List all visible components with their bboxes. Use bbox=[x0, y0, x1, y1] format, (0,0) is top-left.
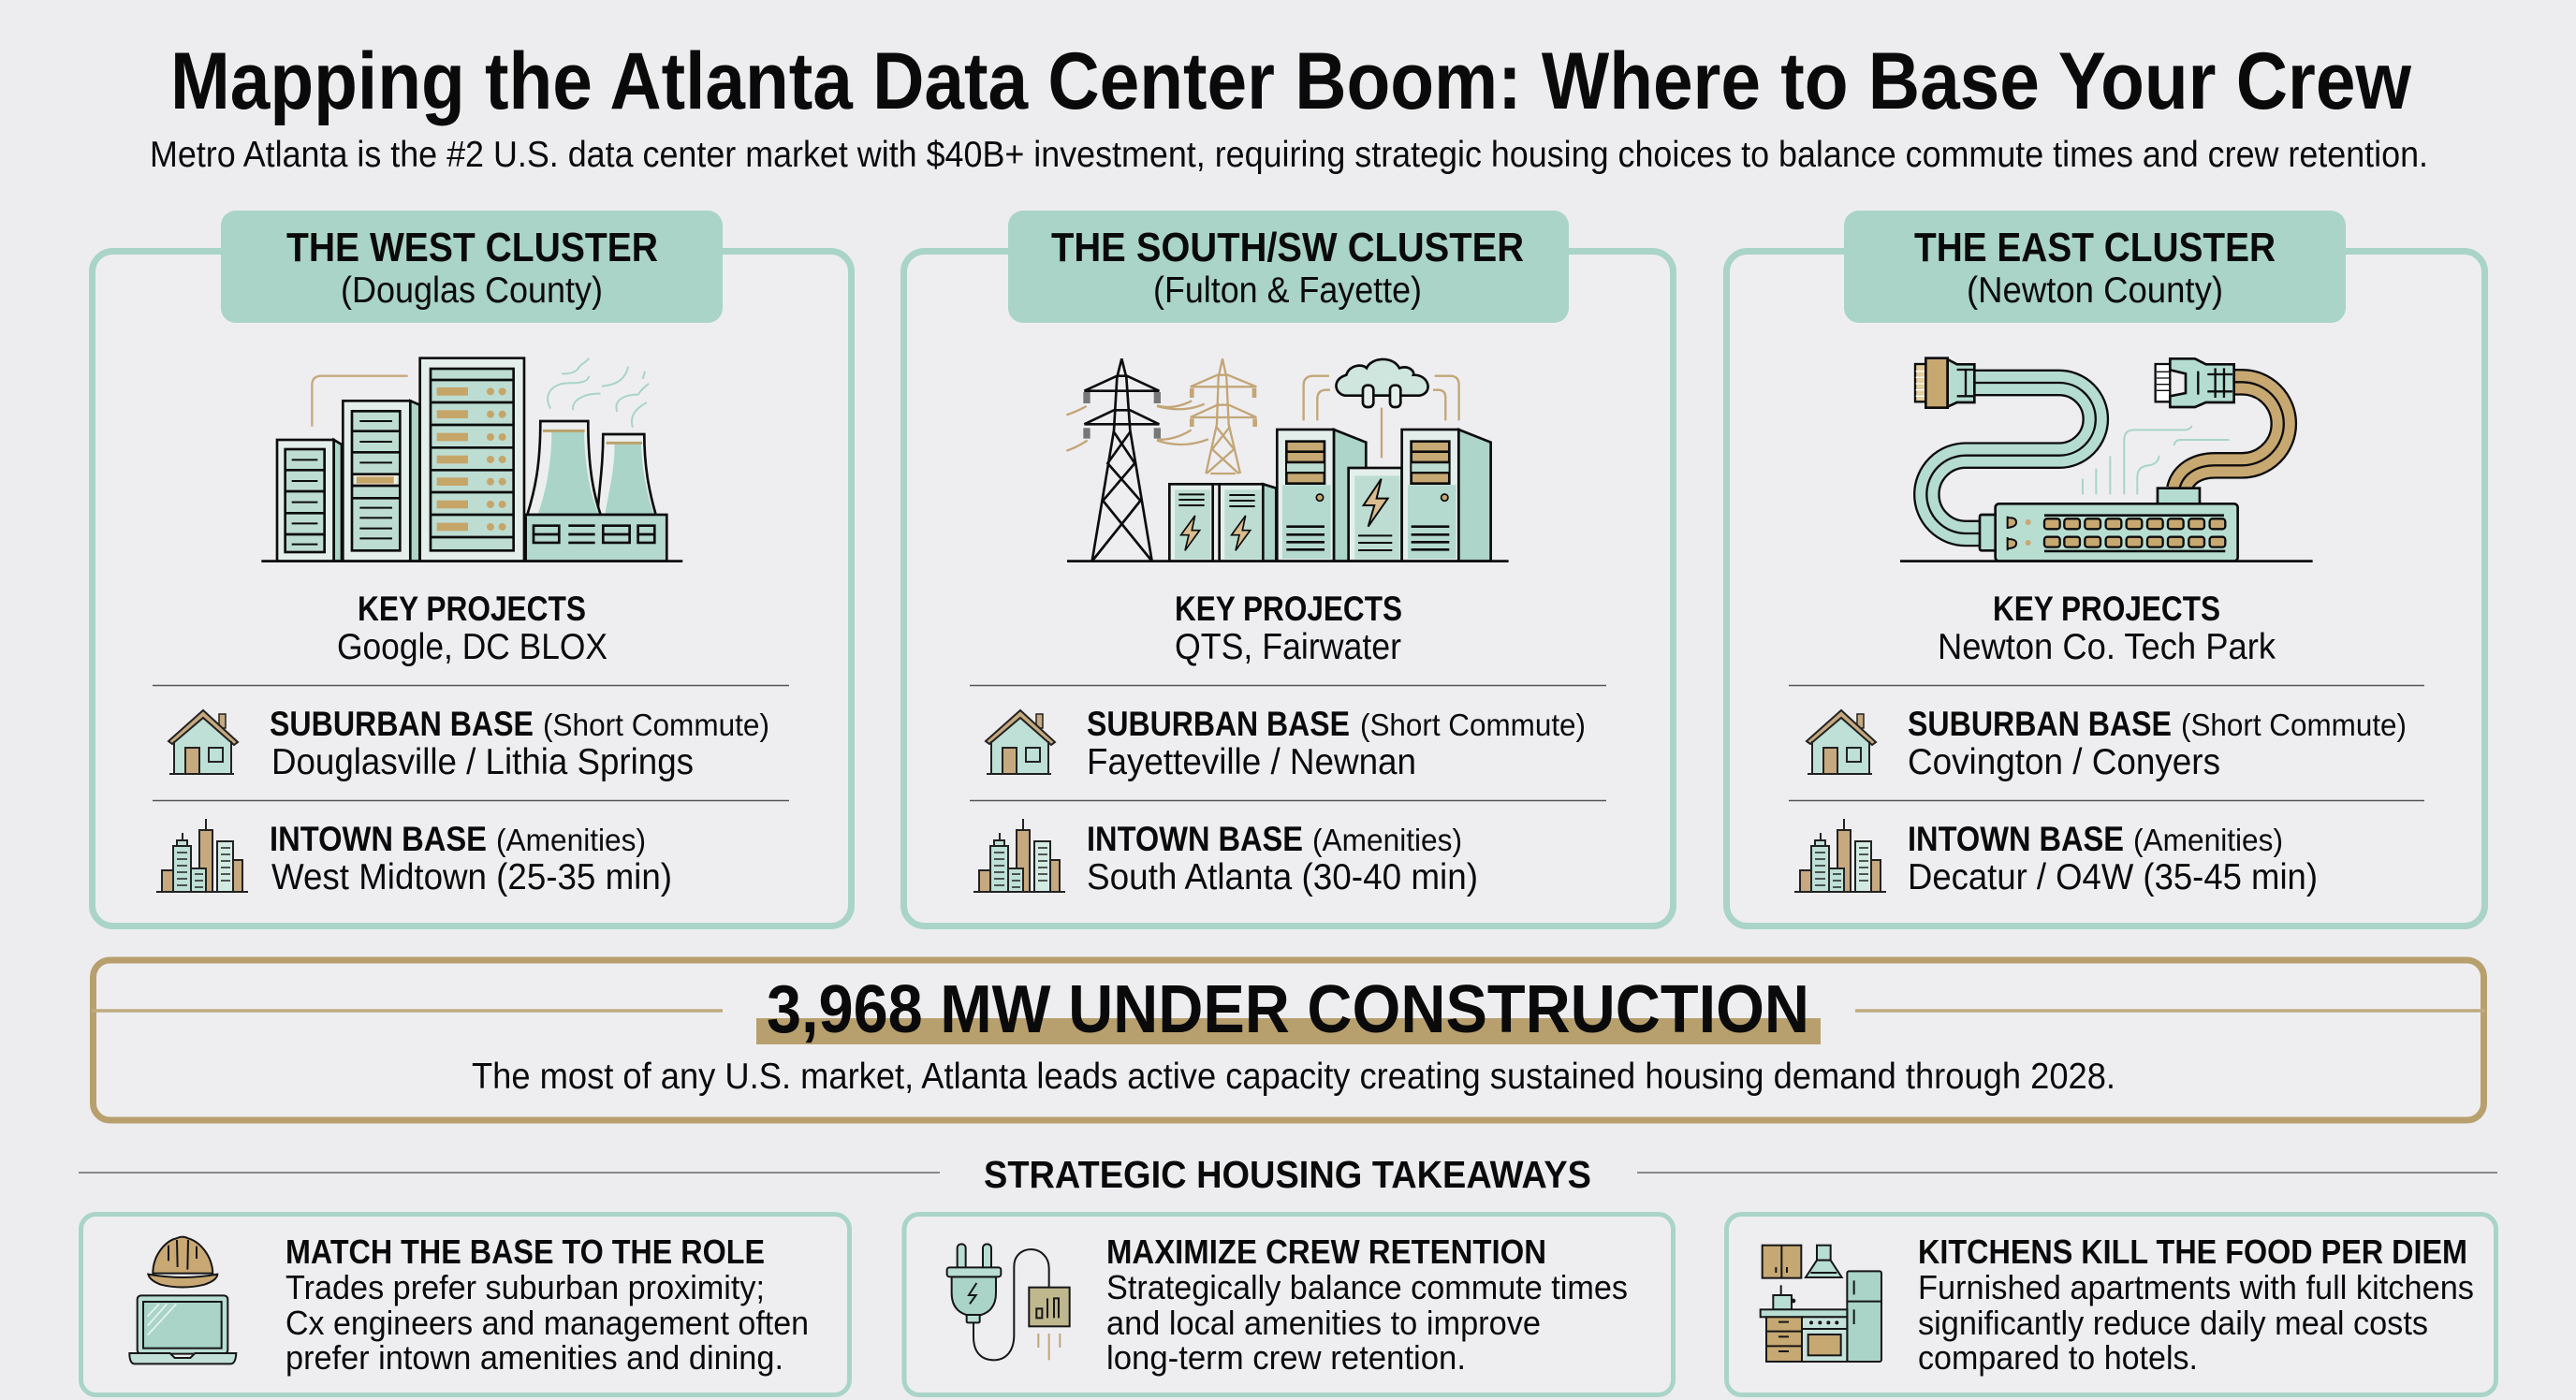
illustration: network cables and switch bbox=[1900, 358, 2313, 561]
section heading: strategic housing takeaways: STRATEGIC HOUSING TAKEAWAYS bbox=[984, 1153, 1591, 1196]
suburban base: west: SUBURBAN BASE bbox=[270, 705, 534, 743]
card text: match the base to the role: Cx engineers and management often bbox=[285, 1304, 809, 1342]
key projects: east: KEY PROJECTS bbox=[1993, 590, 2220, 628]
key projects: west: Google, DC BLOX bbox=[337, 627, 607, 667]
heading tab: south/sw cluster: (Fulton & Fayette) bbox=[1153, 270, 1422, 311]
callout: 3,968 MW under construction: The most of any U.S. market, Atlanta leads active capacity creating sustained housing demand through 2028. bbox=[472, 1057, 2115, 1097]
card text: maximize crew retention: Strategically balance commute times bbox=[1106, 1268, 1628, 1306]
intown base: west: INTOWN BASE bbox=[270, 820, 487, 858]
icon: suburban house bbox=[1807, 710, 1876, 774]
card text: match the base to the role: MATCH THE BASE TO THE ROLE bbox=[285, 1232, 765, 1271]
suburban base: south: (Short Commute) bbox=[1360, 707, 1586, 742]
key projects: south bbox=[1175, 590, 1402, 667]
suburban base: west: Douglasville / Lithia Springs bbox=[271, 742, 694, 782]
icon: intown skyline bbox=[973, 819, 1065, 892]
panel: west cluster bbox=[92, 211, 852, 926]
suburban base: east: SUBURBAN BASE bbox=[1908, 705, 2172, 743]
illustration: transmission towers and powered data halls bbox=[1066, 358, 1509, 561]
illustration: data center racks and cooling towers bbox=[261, 358, 682, 561]
card text: match the base to the role bbox=[285, 1232, 809, 1377]
heading tab: south/sw cluster bbox=[1008, 211, 1569, 323]
intown base: south: (Amenities) bbox=[1312, 823, 1462, 857]
icon: kitchen bbox=[1761, 1246, 1881, 1362]
card text: match the base to the role: prefer intown amenities and dining. bbox=[285, 1338, 783, 1377]
key projects: south: QTS, Fairwater bbox=[1175, 627, 1401, 667]
icon: plug and meter bbox=[947, 1244, 1070, 1360]
key projects: east: Newton Co. Tech Park bbox=[1938, 627, 2276, 667]
card: match the base to the role bbox=[80, 1215, 850, 1394]
heading tab: west cluster: THE WEST CLUSTER bbox=[286, 225, 658, 270]
heading tab: east cluster bbox=[1844, 211, 2346, 323]
card text: match the base to the role: Trades prefer suburban proximity; bbox=[285, 1268, 765, 1306]
icon: suburban house bbox=[986, 710, 1055, 774]
key projects: west bbox=[337, 590, 607, 667]
intown base: south: South Atlanta (30-40 min) bbox=[1087, 857, 1478, 897]
heading tab: west cluster: (Douglas County) bbox=[341, 270, 603, 311]
suburban base: south: SUBURBAN BASE bbox=[1087, 705, 1350, 743]
intown base: west: West Midtown (25-35 min) bbox=[271, 857, 672, 897]
suburban base: west: (Short Commute) bbox=[543, 707, 769, 742]
icon: suburban house bbox=[168, 710, 238, 774]
card text: maximize crew retention: MAXIMIZE CREW RETENTION bbox=[1106, 1232, 1546, 1271]
heading tab: east cluster: (Newton County) bbox=[1967, 270, 2223, 311]
card text: kitchens kill the food per diem: compared to hotels. bbox=[1918, 1338, 2198, 1377]
card text: kitchens kill the food per diem bbox=[1918, 1232, 2474, 1377]
card text: kitchens kill the food per diem: significantly reduce daily meal costs bbox=[1918, 1304, 2428, 1342]
panel: east cluster bbox=[1726, 211, 2484, 926]
icon: intown skyline bbox=[156, 819, 248, 892]
suburban base: south: Fayetteville / Newnan bbox=[1087, 742, 1416, 782]
card text: kitchens kill the food per diem: KITCHENS KILL THE FOOD PER DIEM bbox=[1918, 1232, 2467, 1271]
card text: kitchens kill the food per diem: Furnished apartments with full kitchens bbox=[1918, 1268, 2474, 1306]
subtitle: Metro Atlanta is the #2 U.S. data center market with $40B+ investment, requiring strategic housing choices to balance commute times and crew retention. bbox=[150, 135, 2428, 175]
key projects: south: KEY PROJECTS bbox=[1175, 590, 1402, 628]
suburban base: east: Covington / Conyers bbox=[1908, 742, 2220, 782]
suburban base: south bbox=[1087, 705, 1586, 782]
intown base: west bbox=[270, 820, 672, 897]
card text: maximize crew retention: and local amenities to improve bbox=[1106, 1304, 1541, 1342]
callout: 3,968 MW under construction: 3,968 MW UNDER CONSTRUCTION bbox=[767, 972, 1809, 1047]
intown base: west: (Amenities) bbox=[496, 823, 646, 857]
suburban base: west bbox=[270, 705, 769, 782]
heading tab: west cluster bbox=[221, 211, 723, 323]
panel: south/southwest cluster bbox=[904, 211, 1674, 926]
key projects: east bbox=[1938, 590, 2276, 667]
card: kitchens kill the food per diem bbox=[1726, 1215, 2496, 1394]
card text: maximize crew retention: long-term crew retention. bbox=[1106, 1338, 1466, 1377]
suburban base: east bbox=[1908, 705, 2407, 782]
intown base: south bbox=[1087, 820, 1478, 897]
intown base: east: Decatur / O4W (35-45 min) bbox=[1908, 857, 2318, 897]
icon: hard hat and laptop bbox=[129, 1237, 236, 1364]
card: maximize crew retention bbox=[904, 1215, 1674, 1394]
heading tab: south/sw cluster: THE SOUTH/SW CLUSTER bbox=[1051, 225, 1524, 270]
key projects: west: KEY PROJECTS bbox=[358, 590, 586, 628]
callout: 3,968 MW under construction bbox=[92, 960, 2485, 1120]
intown base: east bbox=[1908, 820, 2318, 897]
intown base: east: INTOWN BASE bbox=[1908, 820, 2124, 858]
intown base: east: (Amenities) bbox=[2133, 823, 2283, 857]
heading tab: east cluster: THE EAST CLUSTER bbox=[1914, 225, 2276, 270]
suburban base: east: (Short Commute) bbox=[2181, 707, 2407, 742]
icon: intown skyline bbox=[1794, 819, 1886, 892]
card text: maximize crew retention bbox=[1106, 1232, 1628, 1377]
intown base: south: INTOWN BASE bbox=[1087, 820, 1303, 858]
